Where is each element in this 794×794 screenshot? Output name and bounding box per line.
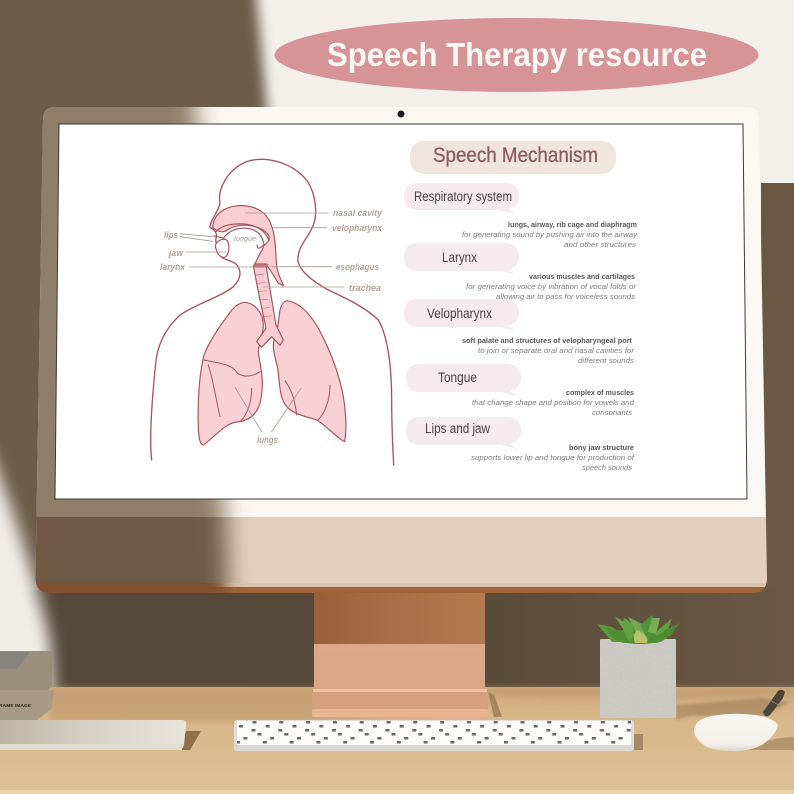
section: tongue: complex of muscles <box>566 388 634 397</box>
diagram labels: nasal cavity <box>333 208 383 218</box>
anatomy diagram <box>151 159 394 465</box>
section: larynx: for generating voice by vibration of vocal folds or <box>466 282 637 291</box>
head and body outline <box>151 159 394 465</box>
section: larynx: various muscles and cartilages <box>529 272 635 281</box>
keyboard <box>234 720 643 751</box>
diagram labels: esophagus <box>336 262 379 272</box>
monitor body <box>36 107 767 593</box>
diagram labels: jaw <box>168 248 184 258</box>
diagram labels: lips <box>164 230 178 240</box>
desk <box>0 687 794 794</box>
section: respiratory system <box>404 183 638 249</box>
title banner: Speech Therapy resource <box>327 36 707 73</box>
monitor stand <box>312 590 488 717</box>
section: respiratory system: and other structures <box>564 240 636 249</box>
section: lips and jaw: Lips and jaw <box>425 421 490 436</box>
succulent <box>597 615 680 644</box>
diagram labels: trachea <box>349 283 381 293</box>
tablet <box>0 720 201 750</box>
section: tongue: Tongue <box>438 370 477 385</box>
section: tongue <box>406 364 635 417</box>
section: respiratory system: for generating sound by pushing air into the airway <box>462 230 638 239</box>
webcam <box>398 110 404 118</box>
heading pill: Speech Mechanism <box>433 144 598 167</box>
section: tongue: consonants <box>592 408 632 417</box>
mouse <box>694 714 794 751</box>
section: larynx: Larynx <box>442 250 477 265</box>
leader lines <box>180 213 344 432</box>
vocal tract <box>213 206 284 286</box>
section: lips and jaw: supports lower lip and tongue for production of <box>471 453 635 462</box>
diagram labels: velopharynx <box>332 223 383 233</box>
lungs <box>198 301 346 445</box>
diagram labels <box>160 208 383 445</box>
pen <box>763 690 785 716</box>
mouth and jaw <box>214 236 229 257</box>
section: velopharynx: Velopharynx <box>427 306 492 321</box>
section: larynx <box>404 243 637 301</box>
heading pill <box>410 141 616 174</box>
section: velopharynx: different sounds <box>578 356 634 365</box>
section: larynx: allowing air to pass for voiceless sounds <box>496 292 635 301</box>
diagram labels: tongue <box>234 236 256 243</box>
diagram labels: lungs <box>257 435 278 445</box>
section: velopharynx <box>404 299 635 365</box>
title banner <box>274 18 758 92</box>
section: velopharynx: to join or separate oral and nasal cavities for <box>478 346 635 355</box>
diagram labels: larynx <box>160 262 186 272</box>
trachea <box>253 265 283 347</box>
plant pot <box>600 639 676 718</box>
section: respiratory system: lungs, airway, rib cage and diaphragm <box>508 220 637 229</box>
section: lips and jaw: speech sounds <box>582 463 632 472</box>
section: lips and jaw <box>406 417 635 472</box>
section: lips and jaw: bony jaw structure <box>569 443 634 452</box>
section: respiratory system: Respiratory system <box>414 189 512 204</box>
section: velopharynx: soft palate and structures of velopharyngeal port <box>462 336 632 345</box>
books <box>0 651 54 726</box>
screen <box>55 124 747 499</box>
section: tongue: that change shape and position for vowels and <box>472 398 635 407</box>
